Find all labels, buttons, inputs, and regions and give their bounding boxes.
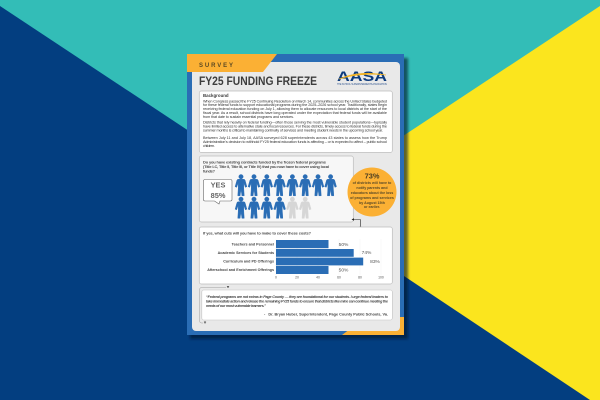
panel: contracts question [199, 156, 353, 222]
poster frame [187, 54, 404, 335]
callout circle: 73%: or earlier. [364, 205, 380, 209]
background text: Administration's decision to withhold FY25 federal education funds is affecting – or is expected to affect – public school [203, 140, 387, 144]
bar labels: Academic Services for Students [218, 251, 274, 255]
question text: (Title I-C, Title II, Title III, or Title IV) that you now have to cover using local [203, 164, 329, 169]
callout circle: 73%: 73% [365, 171, 380, 180]
poster inner sheet [192, 62, 400, 331]
question text [203, 159, 329, 174]
background text: fiscal year. As a result, school districts have long operated under the expectation that federal funds will be available [203, 111, 387, 115]
bar values: 83% [370, 259, 381, 265]
axis labels: 80 [358, 275, 362, 279]
bar values: 50% [339, 242, 349, 248]
callout circle: 73%: of programs and services [350, 196, 394, 200]
orange corner: bottom right [342, 317, 404, 335]
quote marks: ” [226, 287, 230, 293]
quote text: take immediate action and release the remaining FY25 funds to ensure that districts like mine can continue meeting the [206, 300, 388, 304]
quote bracket [200, 288, 226, 323]
question text: Do you have existing contracts funded by the frozen federal programs [203, 159, 327, 164]
quote box [202, 290, 392, 320]
panel: cuts chart [199, 227, 392, 284]
bar labels [207, 242, 274, 272]
quote marks: ” [204, 322, 206, 328]
background text: Districts that rely heavily on federal funding—often those serving the most vulnerable student populations—typically [203, 121, 387, 125]
title: FY25 FUNDING FREEZE [199, 75, 317, 88]
callout circle: 73%: educators about the loss [351, 191, 393, 195]
background text: children. [203, 144, 215, 148]
bar labels: Curriculum and PD Offerings [223, 260, 274, 264]
background text [203, 99, 387, 148]
callout circle: 73%: notify parents and [356, 186, 388, 190]
orange banner [187, 54, 277, 72]
quote marks [204, 287, 230, 328]
bar chart [207, 239, 384, 279]
bars [276, 240, 363, 274]
logo: AASA [337, 68, 387, 84]
axis labels: 60 [337, 275, 341, 279]
bar values: 50% [339, 268, 349, 274]
chart question: If yes, what cuts will you have to make to cover these costs? [203, 230, 312, 235]
background: yellow right triangle [300, 6, 600, 400]
pictogram: people [235, 174, 336, 218]
axis labels [275, 275, 384, 279]
background text: have limited access to alternative state and local resources. For these districts, timely access to federal funds during the [203, 124, 387, 128]
background text: When Congress passed the FY25 Continuing Resolution on March 14, communities across the United States budgeted [203, 99, 387, 103]
bar values: 74% [362, 250, 372, 256]
callout: yes 85%: 85% [211, 191, 226, 200]
quote text [206, 295, 389, 308]
background text: summer months is critical to maintaining continuity of services and meeting student needs in the upcoming school year. [203, 129, 383, 133]
background heading: Background [203, 93, 229, 98]
callout circle: 73%: by August 15th [359, 201, 385, 205]
logo swoosh [339, 73, 386, 79]
panel: background [199, 91, 392, 152]
axis labels: 20 [295, 275, 299, 279]
axis labels: 40 [316, 275, 320, 279]
background text: Between July 11 and July 18, AASA surveyed 628 superintendents across 43 states to assess how the Trump [203, 136, 387, 140]
panel: quote [200, 287, 392, 328]
axis labels: 0 [275, 275, 277, 279]
question text: funds? [203, 168, 216, 174]
poster [187, 54, 408, 339]
bar labels: Teachers and Personnel [232, 242, 274, 246]
callout circle: 73% [348, 168, 396, 216]
arrow: connector [352, 218, 362, 229]
background text: for these federal funds to support educational programs during the 2025–2026 school year. Traditionally, states begin [203, 103, 387, 107]
axis labels: 100 [378, 275, 384, 279]
background text: receiving federal education funding on July 1, allowing them to allocate resources to local districts at the start of the [203, 107, 387, 111]
bar values [339, 242, 381, 274]
bar labels: Afterschool and Enrichment Offerings [207, 268, 274, 272]
background text: from that date to sustain essential programs and services. [203, 115, 294, 119]
quote text: needs of our most vulnerable learners.” [206, 304, 266, 308]
callout circle: 73%: of districts will have to [353, 181, 392, 185]
callout: yes 85% [204, 180, 232, 204]
quote text: “Federal programs are not extras in Page County — they are foundational for our students. I urge federal leaders to [206, 295, 389, 299]
callout: yes 85%: YES [211, 181, 225, 190]
quote attribution: - Dr. Bryan Huber, Superintendent, Page County Public Schools, Va. [264, 313, 388, 317]
banner label: SURVEY [199, 63, 233, 69]
logo: THE SCHOOL SUPERINTENDENTS ASSOCIATION [337, 83, 387, 86]
poster shadow [190, 58, 408, 339]
